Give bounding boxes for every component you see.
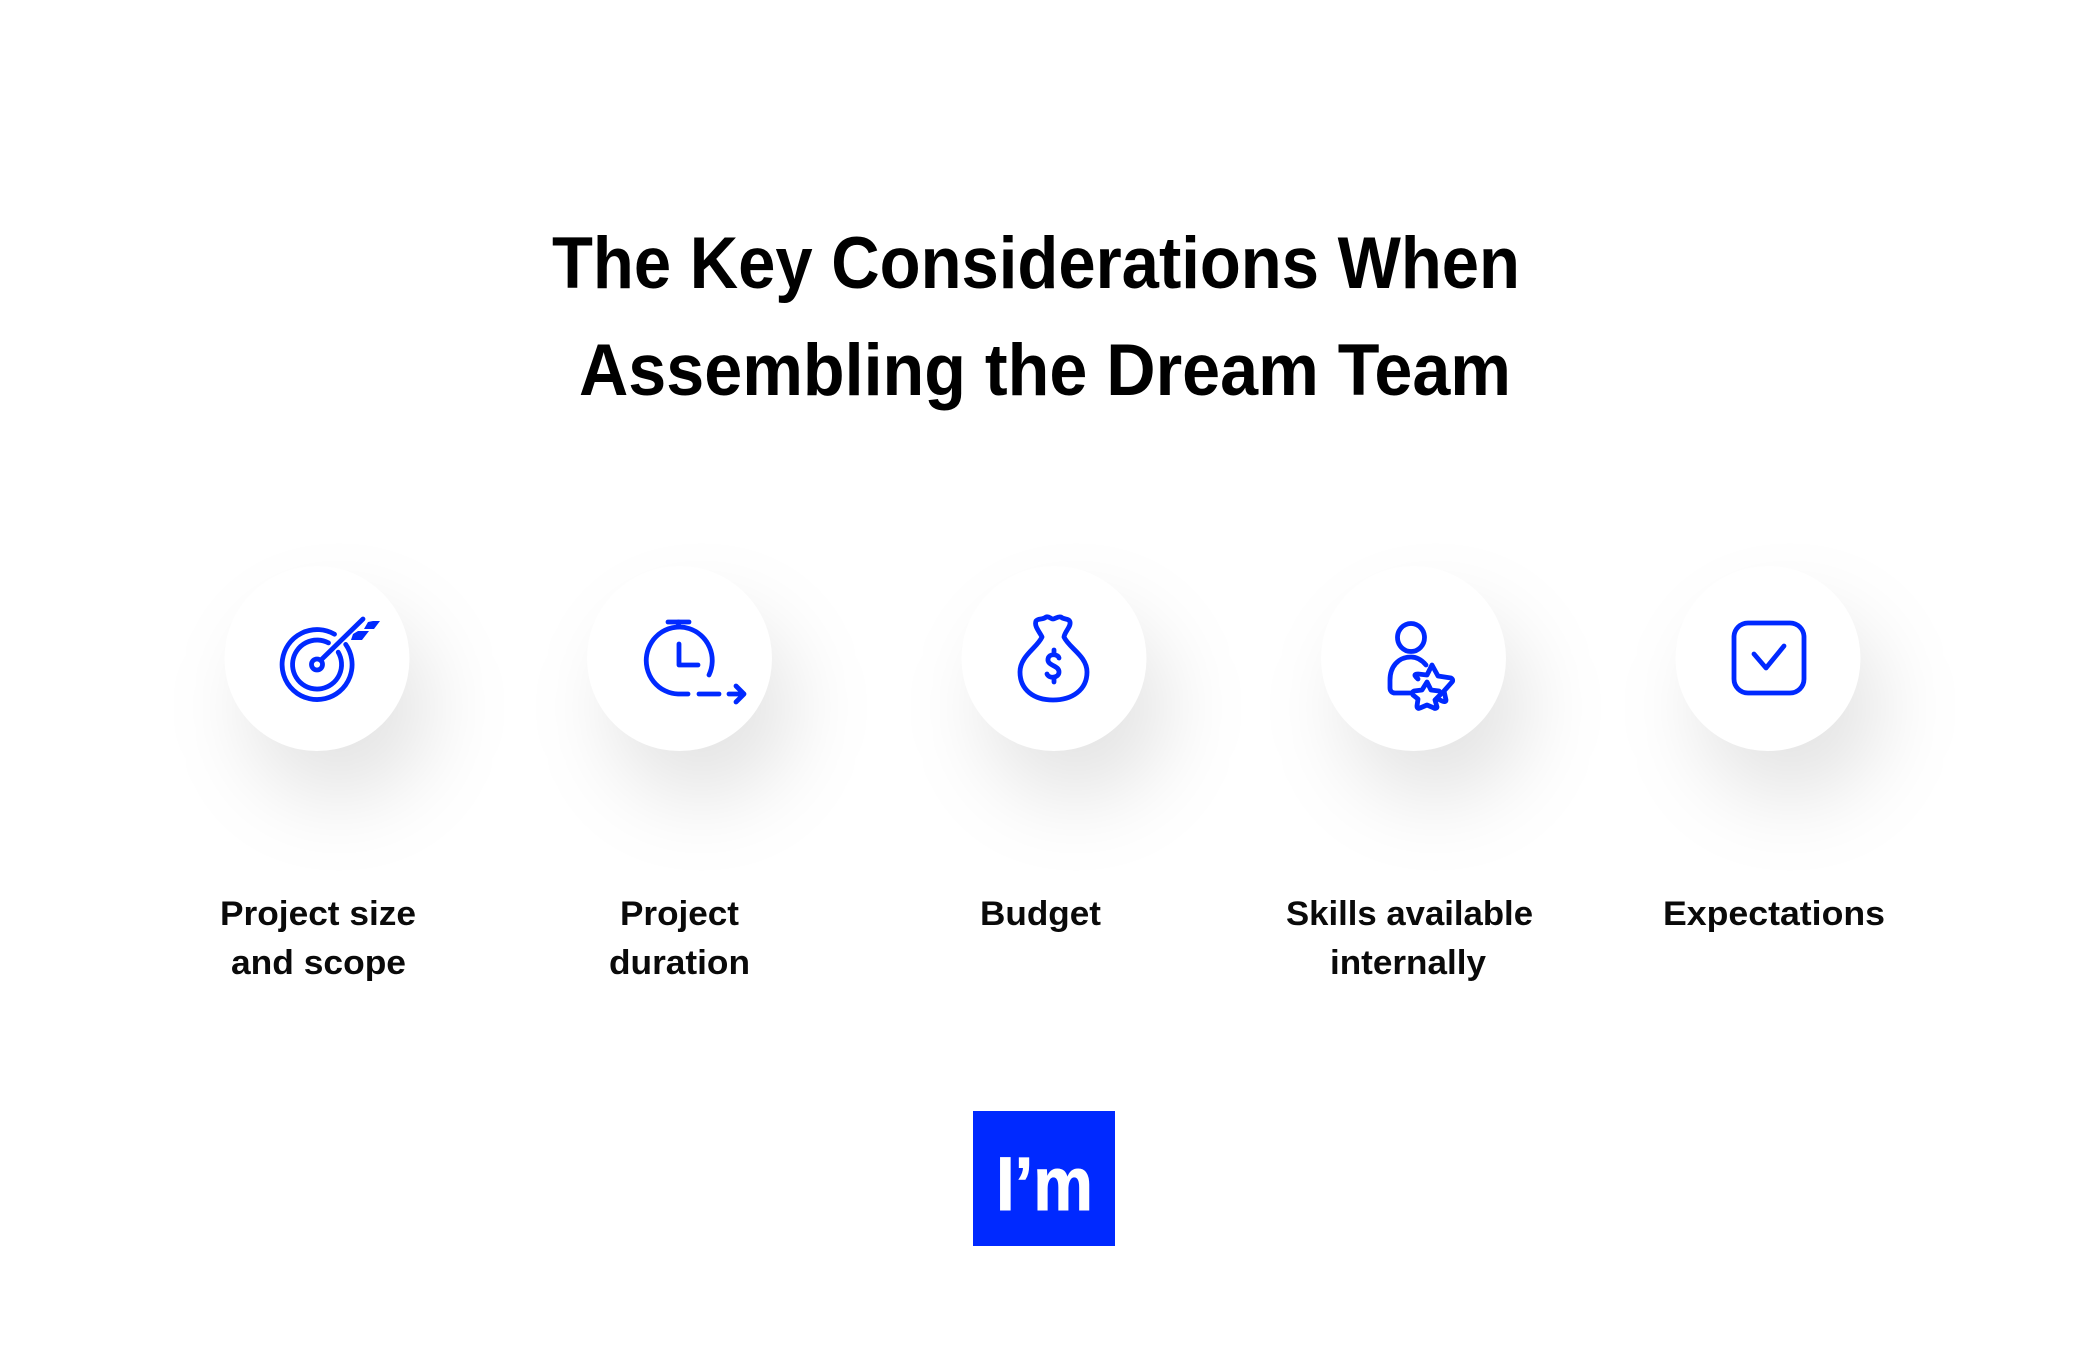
label: project size and scope [220, 895, 416, 982]
panel: skills available internally [1286, 566, 1533, 982]
icon: target with arrow [282, 619, 380, 700]
label: project size and scope: Project size [220, 895, 416, 933]
icon: money bag [1020, 617, 1087, 700]
panel: project duration [587, 566, 794, 982]
label: skills available internally: Skills available [1286, 895, 1533, 933]
title [552, 223, 1520, 411]
logo: I’m [996, 1142, 1093, 1227]
title: The Key Considerations When [552, 223, 1520, 304]
icon: checkbox [1734, 623, 1804, 693]
panel: budget [962, 566, 1168, 933]
icon: person with stars [1390, 624, 1453, 708]
label: project size and scope: and scope [231, 944, 406, 982]
panel: expectations [1663, 566, 1885, 933]
label: skills available internally: internally [1330, 944, 1486, 982]
label: project duration: duration [609, 944, 750, 982]
label: project duration: Project [620, 895, 739, 933]
label: expectations: Expectations [1663, 895, 1885, 933]
icon: stopwatch with dashed arrow [646, 622, 744, 702]
panel: project size and scope [220, 566, 432, 982]
title: Assembling the Dream Team [579, 330, 1511, 411]
label: skills available internally [1286, 895, 1533, 982]
logo [973, 1111, 1115, 1246]
label: project duration [609, 895, 750, 982]
label: budget: Budget [980, 895, 1101, 933]
